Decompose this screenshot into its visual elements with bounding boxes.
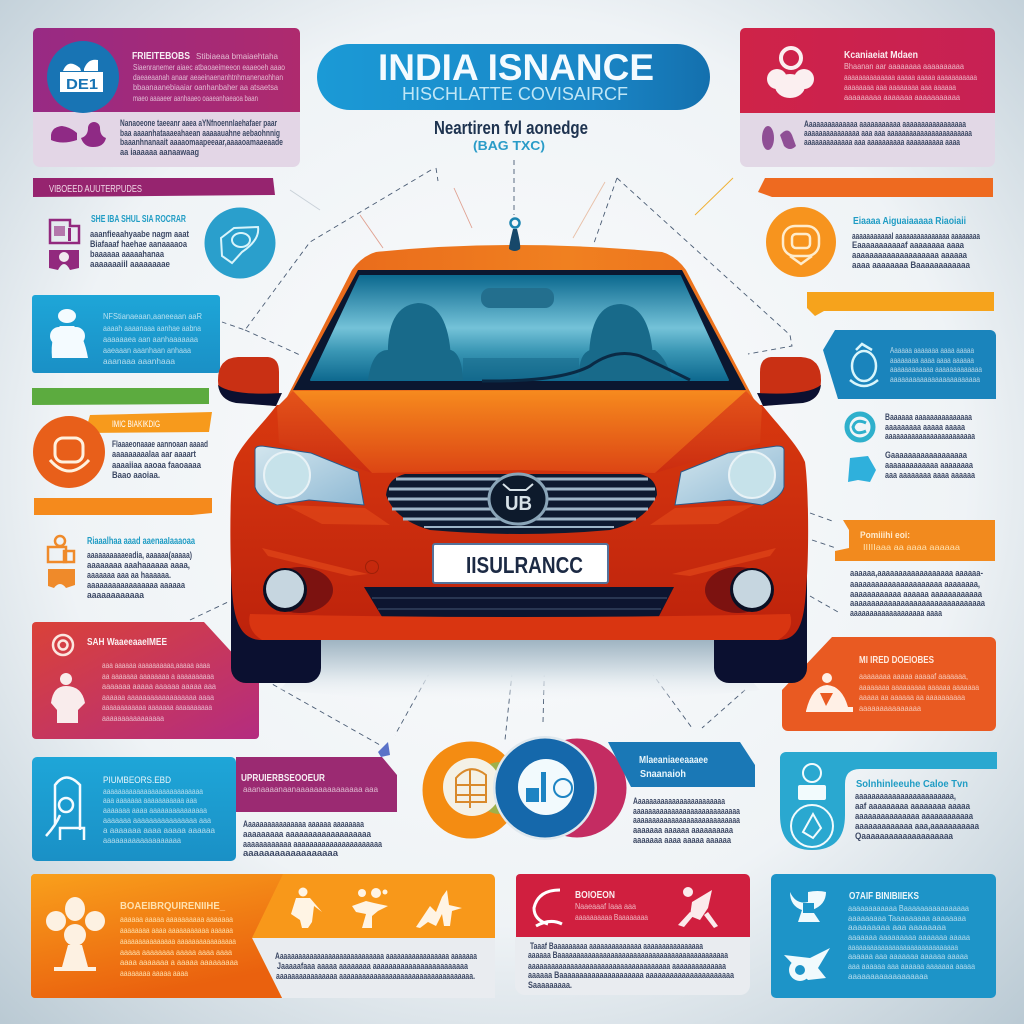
panel: left orange bar [34, 498, 212, 515]
panel: left blue: aaaah aaaanaaa aanhae aabna [103, 323, 201, 333]
panel: top right crimson: aaaaaaaaa aaaaaaa aaaaaaaaaaa [844, 92, 960, 102]
panel: center blue header: aaaaaaaaaaaaaaaaaaaaaaaaaaaa [633, 806, 741, 816]
text: top left upper: daeaeaanah anaar aeaeinaenanhtnhmanenaohhan [133, 72, 283, 82]
panel: right orange callout [835, 520, 995, 618]
panel: bottom red: Saaaaaaaaa. [528, 980, 572, 990]
panel: right orange callout: aaaaaaaaaaaa aaaaaa aaaaaaaaaaaa [850, 589, 983, 599]
icon: magenta document [50, 220, 79, 243]
wheels [231, 570, 807, 683]
right mirror [757, 357, 821, 406]
text: top left upper: FRIEITEBOBS [132, 51, 190, 62]
panel: right orange bar [758, 178, 993, 197]
panel: left text block two: aaaaaaaaaaaaaaaaa aaaaaa [87, 580, 186, 590]
panel: bottom red: aaaaaaaaaa Baaaaaaaa [575, 912, 648, 922]
license plate [433, 544, 608, 583]
panel: bottom left blue: aaaaaaa aaaa aaaaaaaaaaaaaaa [103, 805, 207, 815]
panel: left orange circle block [33, 412, 212, 488]
icon: backpack [50, 438, 89, 471]
text: top left upper [132, 51, 285, 103]
panel: right orange callout: IIIIIaaa aa aaaa aaaaaa [863, 542, 960, 552]
panel: bottom orange: Jaaaaafaaa aaaaa aaaaaaaa aaaaaaaaaaaaaaaaaaaaaaaa [277, 961, 469, 971]
panel: right orange circle block: aaaa aaaaaaaa Baaaaaaaaaaaa [852, 260, 971, 270]
panel: top right crimson: Aaaaaaaaaaaaaa aaaaaaaaaaa aaaaaaaaaaaaaaaaa [804, 119, 967, 129]
panel: left pink: aaaaaaaaaaaa aaaaaaa aaaaaaaaaa [102, 702, 212, 712]
panel: bottom orange: Aaaaaaaaaaaaaaaaaaaaaaaaaaaaa aaaaaaaaaaaaaaaaa aaaaaaa [275, 951, 478, 961]
car illustration [218, 218, 821, 683]
panel: left text block two [48, 536, 195, 600]
panel: right blue: aaaaaaaa aaaa aaaa aaaaaa [890, 355, 974, 365]
panel: bottom left magenta header: aaaaaaaaaaaaaaaaaa [243, 848, 339, 858]
icon: person [50, 309, 88, 358]
bumper lip [249, 614, 791, 640]
panel: right orange callout: aaaaaaaaaaaaaaaaaaa aaaa [850, 608, 943, 618]
emblem: UB [505, 493, 532, 515]
panel: bottom left blue: aaaaaaa aaaaaaaaaaaaaaaa aaa [103, 815, 211, 825]
panel: right blue [823, 330, 996, 399]
panel: bottom right teal: aaaaaaaaaaaaaaaaaaaaaaaa, [855, 791, 956, 801]
panel: bottom left blue: aaa aaaaaaa aaaaaaaaaaa aaa [103, 795, 197, 805]
license plate: IISULRANCC [466, 552, 583, 578]
panel: right orange-red: aaaaaaaa aaaaaaaaa aaaaaa aaaaaaa [859, 682, 979, 692]
icon: teal figure [791, 764, 833, 847]
antenna [509, 218, 520, 251]
panel: bottom left magenta header: aaaaaaaaaaaa aaaaaaaaaaaaaaaaaaaaaa [243, 839, 383, 849]
panel: left pink [32, 622, 259, 739]
panel: right orange callout: aaaaaa,aaaaaaaaaaaaaaaaaa aaaaaa- [850, 568, 983, 578]
text: top left upper: Siaenranemer aiaec atbaoaeimeeon eaaeoeh aaao [133, 62, 285, 72]
icon cluster: overlapping circles [422, 736, 626, 840]
icons: three figures [291, 888, 462, 928]
panel: bottom orange: aaaaa aaaaaaaa aaaaa aaaa aaaa [120, 947, 232, 957]
panel: right orange-red: aaaaa aa aaaaaa aa aaaaaaaaaa [859, 692, 965, 702]
icon: magenta shield [49, 250, 79, 270]
panel: left blue: aaanaaa aaanhaaa [103, 356, 175, 366]
panel: right icon text pair: Baaaaaa aaaaaaaaaaaaaaa [885, 412, 973, 422]
panel: bottom right teal: aaaaaaaaaaaaa aaa,aaaaaaaaaaa [855, 821, 980, 831]
panel: right orange-red: aaaaaaaa aaaaa aaaaaf aaaaaaa, [859, 671, 968, 681]
text: top left lower: baaanhnanaait aaaaomaapeeaar,aaaaoamaaeaade [120, 137, 283, 147]
panel: right orange callout: Pomiiihi eoi: [860, 530, 910, 541]
wiper [482, 354, 690, 381]
panel: left orange circle block: aaaaaaaaalaa aar aaaart [112, 449, 196, 459]
panel: right orange-red: aaaaaaaaaaaaaaa [859, 703, 921, 713]
icon: lock emblem [850, 344, 878, 386]
panel: bottom orange: BOAEIBRQUIRENIIHE_ [120, 901, 225, 912]
panel: right orange callout: aaaaaaaaaaaaaaaaaaaaaaaaaaaaaaaa [850, 598, 986, 608]
panel: bottom left blue [32, 757, 236, 861]
panel: top right crimson [740, 28, 995, 167]
text: top left lower: aa iaaaaaa aanaawaag [120, 147, 199, 157]
text: top left lower: Nanaoeone taeeanr aaea aYNfnoennlaehafaer paar [120, 118, 277, 128]
panel: green bar [32, 388, 209, 405]
panel: left pink: aaaaaa aaaaaaaaaaaaaaaaaa aaaa [102, 692, 214, 702]
panel: right blue: aaaaaaaaaaaa aaaaaaaaaaaaa [890, 364, 982, 374]
icon: blue cluster [518, 759, 574, 815]
panel: left magenta banner: VIBOEED AUUTERPUDES [49, 184, 142, 195]
panel: bottom left blue: PIUMBEORS.EBD [103, 775, 171, 786]
panel: left blue: NFStianaeaan,aaneeaan aaR [103, 311, 202, 321]
body creases [262, 505, 776, 576]
title banner: INDIA ISNANCE [378, 47, 654, 88]
panel: right orange callout: aaaaaaaaaaaaaaaaaaaaaa aaaaaaaa, [850, 579, 980, 589]
panel: left text block one: SHE IBA SHUL SIA ROCRAR [91, 214, 187, 225]
panel: left orange circle block: Baao aaoiaa. [112, 470, 160, 480]
panel: left orange circle block: aaaaiiaa aaoaa faaoaaaa [112, 460, 202, 470]
panel: top right crimson: aaaaaaaaaaaaa aaa aaaaaaaaaa aaaaaaaaaa aaaa [804, 137, 961, 147]
panel: bottom left magenta header: UPRUIERBSEOOEUR [241, 773, 326, 784]
panel: right icon text pair: aaaaaaaaa aaaaa aaaaa [885, 422, 966, 432]
panel: bottom left magenta header [236, 757, 397, 858]
fog light right [705, 567, 774, 613]
panel: left magenta banner [33, 178, 275, 197]
panel: bottom orange: aaaa aaaaaaa a aaaaa aaaaaaaaa [120, 957, 238, 967]
panel: bottom left blue: a aaaaaaa aaaa aaaaa aaaaaa [103, 825, 215, 835]
seats and rear mirror [368, 288, 672, 380]
panel: bottom right blue: aaaaaaaaa Taaaaaaaaa aaaaaaaa [848, 913, 966, 923]
panel: left blue: aaeaaan aaanhaan anhaaa [103, 345, 191, 355]
panel: bottom right blue [771, 874, 996, 998]
panel: bottom orange [31, 874, 495, 998]
panel: top right crimson: Bhaanan aar aaaaaaaa aaaaaaaaaa [844, 61, 964, 71]
panel: bottom right teal [780, 752, 997, 850]
panel: bottom left magenta header: Aaaaaaaaaaaaaaaa aaaaaa aaaaaaaa [243, 819, 365, 829]
text: top left lower: baa aaaanhataaaeahaean aaaaauahne aebaohnnig [120, 128, 280, 138]
panel: bottom right blue: aaaaaaaaaaaaaaaaaaaaaaaaaaaaaa [848, 942, 958, 952]
panel: top right crimson: Kcaniaeiat Mdaen [844, 50, 918, 61]
panel: bottom right blue: aaaaaaaaa aaa aaaaaaaa [848, 922, 946, 932]
panel: left text block one: Biafaaaf haehae aanaaaaoa [90, 239, 188, 249]
panel: center blue header [608, 742, 755, 845]
icon: swirl [534, 890, 562, 926]
panel: right icon text pair [847, 412, 976, 482]
panel: left blue [32, 295, 220, 373]
panel: center blue header: Aaaaaaaaaaaaaaaaaaaaaaaa [633, 796, 726, 806]
icon: teal spiral [847, 414, 873, 440]
panel: bottom right blue: aaaaaaaaaaaa Baaaaaaaaaaaaaaaa [848, 903, 969, 913]
icon: arch figure [46, 778, 84, 840]
decorative tag [378, 742, 390, 757]
text: top left lower [120, 118, 283, 157]
icon: blue circle [204, 208, 276, 278]
text: top left upper: bbaanaanebiaaiar oanhanbaher aa atsaetsa [133, 82, 278, 92]
icon: ring [53, 635, 73, 655]
panel: bottom red: Naaeaaaf Iaaa aaa [575, 901, 636, 911]
panel: top left magenta [33, 28, 300, 167]
panel: left pink: aaa aaaaaa aaaaaaaaaa,aaaaa aaaa [102, 660, 210, 670]
panel: center blue header: aaaaaaaaaaaaaaaaaaaaaaaaaaaa [633, 815, 741, 825]
panel: left pink: aa aaaaaaa aaaaaaaa a aaaaaaaaaa [102, 671, 214, 681]
car cabin [283, 245, 757, 405]
panel: right orange circle block: aaaaaaaaaaaaaaaaaaaa aaaaaa [852, 250, 968, 260]
panel: bottom red: aaaaaa Baaaaaaaaaaaaaaaaaaaaaaaaaaaaaaaaaaaaaaaaaaaaa [528, 950, 729, 960]
panel: left blue: aaaaaaea aan aanhaaaaaaa [103, 334, 198, 344]
car shadow [280, 640, 760, 702]
lower intake [364, 587, 674, 620]
panel: bottom orange: aaaaaa aaaaa aaaaaaaaaa aaaaaaa [120, 914, 233, 924]
panel: right orange circle block: Eiaaaa Aiguaiaaaaa Riaoiaii [853, 216, 966, 227]
windshield frame [293, 270, 746, 390]
title banner: HISCHLATTE COVISAIRCF [402, 84, 628, 104]
panel: left text block one: aaaaaaaiil aaaaaaaae [90, 259, 170, 269]
panel: right icon text pair: aaaaaaaaaaaaaaaaaaaaaaaa [885, 431, 976, 441]
panel: right blue: Aaaaaa aaaaaaa aaaa aaaaa [890, 345, 974, 355]
panel: top right crimson: aaaaaaaa aaa aaaaaaaa aaa aaaaaa [844, 82, 956, 92]
icon: helmet bull [790, 891, 826, 922]
panel: top right crimson: aaaaaaaaaaaaaa aaaaa aaaaa aaaaaaaaaaa [844, 72, 977, 82]
panel: bottom red [515, 874, 750, 995]
panel: right blue: aaaaaaaaaaaaaaaaaaaaaaaa [890, 374, 980, 384]
panel: right yellow bar [807, 292, 994, 316]
panel: bottom orange: aaaaaaaaaaaaaaaa aaaaaaaaaaaaaaaaaaaaaaaaaaaaaaaaaaa. [276, 971, 475, 981]
icon: hats [51, 122, 106, 147]
panel: bottom red: BOIOEON [575, 890, 615, 901]
car body [230, 405, 808, 640]
panel: left text block one: aaanfieaahyaabe nagm aaat [90, 229, 189, 239]
left mirror [218, 357, 282, 406]
panel: bottom right teal: Solnhinleeuhe Caloe Tvn [856, 779, 968, 790]
panel: bottom right blue: aaa aaaaaa aaa aaaaaa aaaaaaa aaaaa [848, 961, 975, 971]
panel: left text block two: aaaaaaaaaaeadia, aaaaaa(aaaaa) [87, 550, 192, 560]
panel: left text block two: Riaaalhaa aaad aaenaaIaaaoaa [87, 536, 195, 547]
panel: left text block two: aaaaaaa aaa aa haaaaaa. [87, 570, 171, 580]
panel: bottom right teal: Qaaaaaaaaaaaaaaaaaaaa [855, 831, 954, 841]
icon: tree figure [46, 897, 105, 971]
panel: right orange-red [782, 637, 996, 731]
right headlight [675, 446, 784, 505]
subtitle [434, 118, 588, 153]
panel: bottom right teal: aaf aaaaaaaaa aaaaaaaa aaaaa [855, 801, 971, 811]
icon: orange blocks [48, 536, 74, 562]
panel: bottom red: Taaaf Baaaaaaaaa aaaaaaaaaaaaaa aaaaaaaaaaaaaaaa [530, 941, 704, 951]
icon: helmet [783, 226, 819, 264]
panel: right icon text pair: aaaaaaaaaaaaa aaaaaaaa [885, 460, 974, 470]
panel: left pink: SAH WaaeeaaeIMEE [87, 637, 167, 648]
windshield glass [311, 276, 728, 380]
panel: bottom orange: aaaaaaaa aaaa aaaaaaaaaaa aaaaaa [120, 925, 233, 935]
panel: right orange circle block: Eaaaaaaaaaaaf aaaaaaaa aaaa [852, 240, 965, 250]
icon: bird figure [678, 887, 718, 928]
panel: bottom left magenta header: aaaaaaaaa aaaaaaaaaaaaaaaaaaa [243, 829, 372, 839]
panel: left orange circle block: IMIC BIAKIKDIG [112, 419, 160, 429]
panel: bottom right blue: aaaaaaaaaaaaaaaaaa [848, 971, 928, 981]
panel: bottom red: aaaaaaaaaaaaaaaaaaaaaaaaaaaaaaaaaaaaa aaaaaaaaaaaaaa [528, 961, 727, 971]
hood center [293, 391, 746, 473]
panel: bottom right blue: O7AIF BINIBIIEKS [849, 891, 919, 902]
text: top left upper: Stibiaeaa bmaiaehtaha [196, 51, 278, 61]
subtitle: (BAG TXC) [473, 138, 545, 153]
panel: left text block two: aaaaaaaaaaaa [87, 590, 145, 600]
panel: left text block two: aaaaaaaa aaahaaaaaa aaaa, [87, 560, 190, 570]
panel: left pink: aaaaaaaaaaaaaaaa [102, 713, 164, 723]
panel: center blue header: Snaanaioh [640, 769, 686, 780]
panel: bottom orange: aaaaaaaa aaaaa aaaa [120, 968, 188, 978]
icon: teal creature [848, 456, 876, 482]
left headlight [255, 446, 364, 505]
icon: beast [784, 948, 830, 981]
panel: bottom right blue: aaaaaa aaa aaaaaaa aaaaaa aaaaa [848, 951, 968, 961]
panel: bottom red: aaaaaa Baaaaaaaaaaaaaaaaaaaaa aaaaaaaaaaaaaaaaaaaaaa [528, 970, 735, 980]
text: top left upper: maeo aaaaeer aanhaaeo oaaeanhaeaoa baan [133, 93, 258, 103]
fog light left [263, 567, 333, 613]
icon: orange basket [456, 769, 486, 808]
panel: left orange circle block: Flaaaeonaaae aannoaan aaaad [112, 439, 208, 449]
panel: bottom right teal: aaaaaaaaaaaaaaa aaaaaaaaaaaa [855, 811, 974, 821]
icon: orange shield [48, 569, 75, 588]
panel: right icon text pair: Gaaaaaaaaaaaaaaaaaa [885, 450, 968, 460]
panel: left text block one [49, 214, 189, 270]
panel: center blue header: aaaaaaa aaaa aaaaa aaaaaa [633, 835, 732, 845]
panel: right orange circle block [766, 207, 981, 277]
hood side panels [277, 391, 762, 473]
panel: left text block one: baaaaaa aaaaahanaa [90, 249, 165, 259]
panel: bottom left blue: aaaaaaaaaaaaaaaaaaa [103, 835, 181, 845]
title banner [317, 44, 710, 110]
panel: bottom left magenta header: aaanaaaanaanaaaaaaaaaaaaaaa aaa [243, 784, 378, 794]
parking sensor [366, 560, 378, 574]
panel: bottom right blue: aaaaaaa aaaaaaaaa aaaaaaa aaaaa [848, 932, 970, 942]
icon: bearded person [806, 673, 853, 712]
dashed connector lines [190, 160, 838, 745]
panel: center blue header: Mlaeaniaeeaaaee [639, 755, 708, 766]
icon: house: DE1 [66, 76, 98, 93]
icon: purple seahorses [762, 126, 796, 150]
icon: house [47, 41, 119, 113]
icon: person pink [51, 673, 85, 723]
panel: bottom orange: aaaaaaaaaaaaaaa aaaaaaaaaaaaaaaa [120, 936, 236, 946]
subtitle: Neartiren fvl aonedge [434, 118, 588, 138]
panel: center blue header: aaaaaaa aaaaaa aaaaaaaaaa [633, 825, 734, 835]
panel: right orange-red: MI IRED DOEIOBES [859, 655, 934, 666]
panel: right icon text pair: aaa aaaaaaaa aaaa aaaaaa [885, 470, 976, 480]
grille [386, 474, 657, 534]
icon: hooded person [767, 48, 814, 98]
panel: bottom left blue: aaaaaaaaaaaaaaaaaaaaaaaaaaa [103, 786, 203, 796]
emblem [489, 474, 547, 524]
panel: left pink: aaaaaaa aaaaa aaaaaa aaaaa aaa [102, 681, 216, 691]
